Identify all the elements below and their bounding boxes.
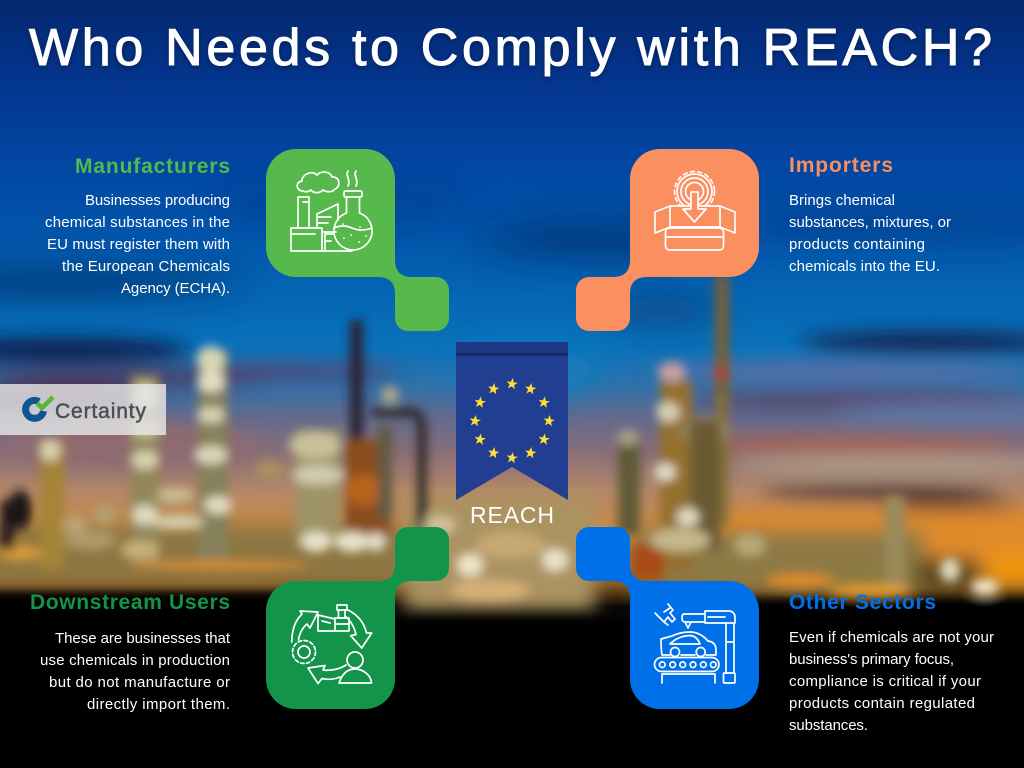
logo: Certainty [0,384,166,435]
panel: manufacturers tile [266,149,449,331]
text block: importers description: chemicals into the EU. [789,258,940,275]
heading: manufacturers: Manufacturers [75,155,230,178]
text block: other sectors description: substances. [789,717,868,734]
banner: EU flag pennant [456,342,568,500]
text block: importers description: Brings chemical [789,192,895,209]
right towers [715,275,729,400]
icon: factory and flask [291,171,372,251]
base band of lights [301,532,331,552]
text block: downstream users description [40,630,231,713]
panel: other sectors tile [576,527,759,709]
icon: box with gear and arrow [655,172,735,250]
text block: manufacturers description: Businesses producing [85,192,230,209]
panel: downstream users text [30,591,231,713]
text block: manufacturers description: Agency (ECHA). [121,280,230,297]
text block: other sectors description [789,629,994,734]
title: Who Needs to Comply with REACH? [29,19,992,77]
icon: recycling loop with factory, gear and person [292,605,372,684]
icon: C ring with green check [26,397,53,418]
logo: Certainty: Certainty [55,400,146,423]
text block: manufacturers description [45,192,230,297]
text block: other sectors description: business's primary focus, [789,651,954,668]
icon: car on assembly line with robot arm [654,604,735,683]
text block: importers description: products containing [789,236,925,253]
text block: other sectors description: products contain regulated [789,695,975,712]
heading: other sectors: Other Sectors [789,591,936,614]
icon: twelve gold stars [469,377,555,464]
text block: importers description: substances, mixtures, or [789,214,951,231]
text block: other sectors description: Even if chemicals are not your [789,629,994,646]
left towers [40,440,64,570]
panel: manufacturers text [45,155,230,297]
text block: downstream users description: These are businesses that [55,630,231,647]
panel: importers tile [576,149,759,331]
text block: manufacturers description: chemical substances in the [45,214,230,231]
panel: downstream users tile [266,527,449,709]
heading: importers: Importers [789,154,893,177]
text block: downstream users description: but do not manufacture or [49,674,230,691]
heading: downstream users: Downstream Users [30,591,230,614]
text block: downstream users description: use chemicals in production [40,652,230,669]
panel: other sectors text [789,591,994,734]
text block: manufacturers description: the European Chemicals [62,258,230,275]
label: REACH: REACH [470,502,554,528]
text block: manufacturers description: EU must register them with [47,236,230,253]
text block: importers description [789,192,951,275]
text block: other sectors description: compliance is critical if your [789,673,981,690]
text block: downstream users description: directly import them. [87,696,230,713]
panel: importers text [789,154,951,275]
